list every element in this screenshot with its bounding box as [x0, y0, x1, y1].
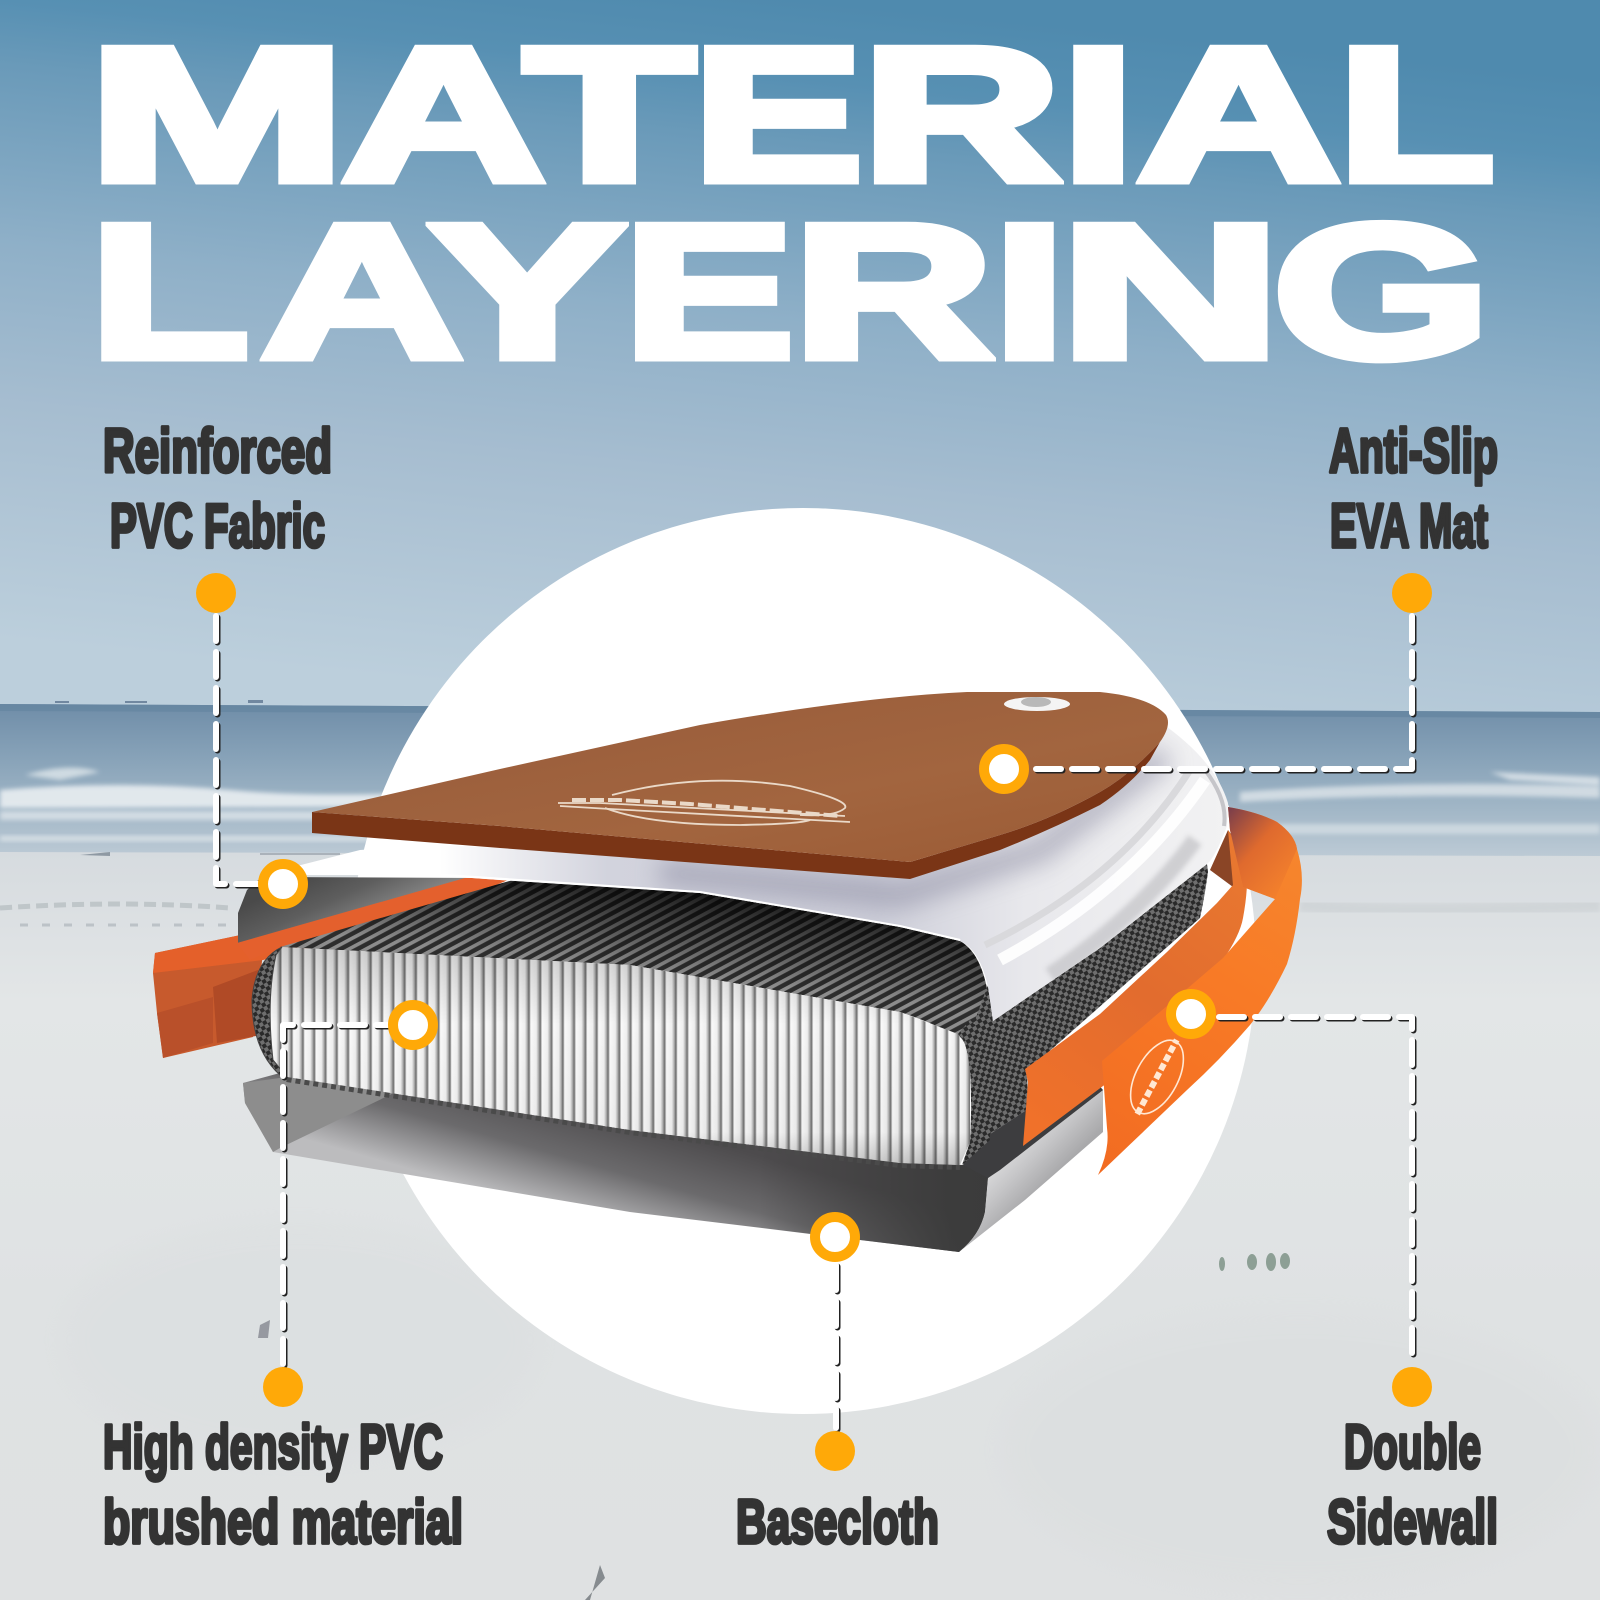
label: Reinforced PVC Fabric: Reinforced — [103, 417, 332, 486]
label: Reinforced PVC Fabric — [103, 417, 332, 561]
title: Material Layering: A — [261, 186, 463, 398]
title: Material Layering: L — [1338, 9, 1495, 221]
label: High density PVC brushed material — [103, 1413, 463, 1557]
label: Anti-Slip EVA Mat — [1329, 417, 1498, 561]
label: High density PVC brushed material: brushed material — [103, 1488, 463, 1557]
layer: dark inner flap — [238, 877, 480, 943]
label: Double Sidewall — [1327, 1413, 1498, 1557]
background: sea — [0, 700, 1600, 856]
white circle backdrop — [350, 508, 1256, 1414]
layer: pillars high density brushed material — [250, 940, 990, 1180]
title: Material Layering: L — [90, 186, 249, 398]
title: Material Layering: Y — [429, 186, 625, 398]
board illustration — [153, 692, 1302, 1252]
title: Material Layering: G — [1273, 186, 1490, 398]
title: Material Layering: M — [88, 9, 346, 221]
label: Double Sidewall: Sidewall — [1327, 1488, 1498, 1557]
layer: orange strip — [237, 878, 513, 960]
label: Double Sidewall: Double — [1344, 1413, 1481, 1482]
layer: double sidewall outer strap — [1098, 807, 1302, 1175]
layer: left orange sidewall end — [153, 878, 513, 1058]
title: Material Layering: R — [793, 186, 993, 398]
leader line: double sidewall — [1219, 1017, 1414, 1366]
title: Material Layering: I — [994, 186, 1065, 398]
layer: dark band under side wall — [963, 1075, 1103, 1178]
layer: carbon side wall — [970, 864, 1208, 1146]
label: Basecloth: Basecloth — [736, 1488, 939, 1557]
background: beach sand — [0, 852, 1600, 1600]
title: Material Layering: T — [524, 9, 695, 221]
icon: valve — [1004, 697, 1070, 711]
beach debris — [258, 1253, 1290, 1600]
label: Anti-Slip EVA Mat: Anti-Slip — [1329, 417, 1498, 486]
layer: carbon drop-stitch top — [280, 880, 990, 1050]
background: sky — [0, 0, 1600, 720]
layer: anti-slip EVA mat — [312, 692, 1168, 879]
icon: mat logo — [558, 781, 850, 825]
title: Material Layering: N — [1060, 186, 1281, 398]
title: Material Layering: A — [342, 9, 545, 221]
leader line: anti-slip EVA mat — [1034, 616, 1414, 770]
title: Material Layering: A — [1137, 9, 1340, 221]
leader line: basecloth — [836, 1265, 838, 1430]
label: High density PVC brushed material: High density PVC — [103, 1413, 443, 1482]
leader line: reinforced PVC fabric — [216, 616, 260, 886]
title: Material Layering: E — [624, 186, 794, 398]
title: Material Layering: R — [862, 9, 1061, 221]
icon: strap logo — [1119, 1030, 1195, 1124]
layer: reinforced PVC fabric sheet — [293, 722, 1228, 1021]
layer: basecloth bottom sheet — [243, 1073, 1103, 1252]
label: Anti-Slip EVA Mat: EVA Mat — [1330, 492, 1488, 561]
title: Material Layering — [88, 9, 1495, 398]
layer: double sidewall inner strap — [1023, 830, 1247, 1146]
label: Reinforced PVC Fabric: PVC Fabric — [110, 492, 325, 561]
title: Material Layering: E — [693, 9, 863, 221]
title: Material Layering: I — [1062, 9, 1134, 221]
label dots — [196, 573, 1432, 1471]
leader line: high density PVC — [283, 1025, 390, 1366]
marker rings on the board — [263, 749, 1211, 1257]
